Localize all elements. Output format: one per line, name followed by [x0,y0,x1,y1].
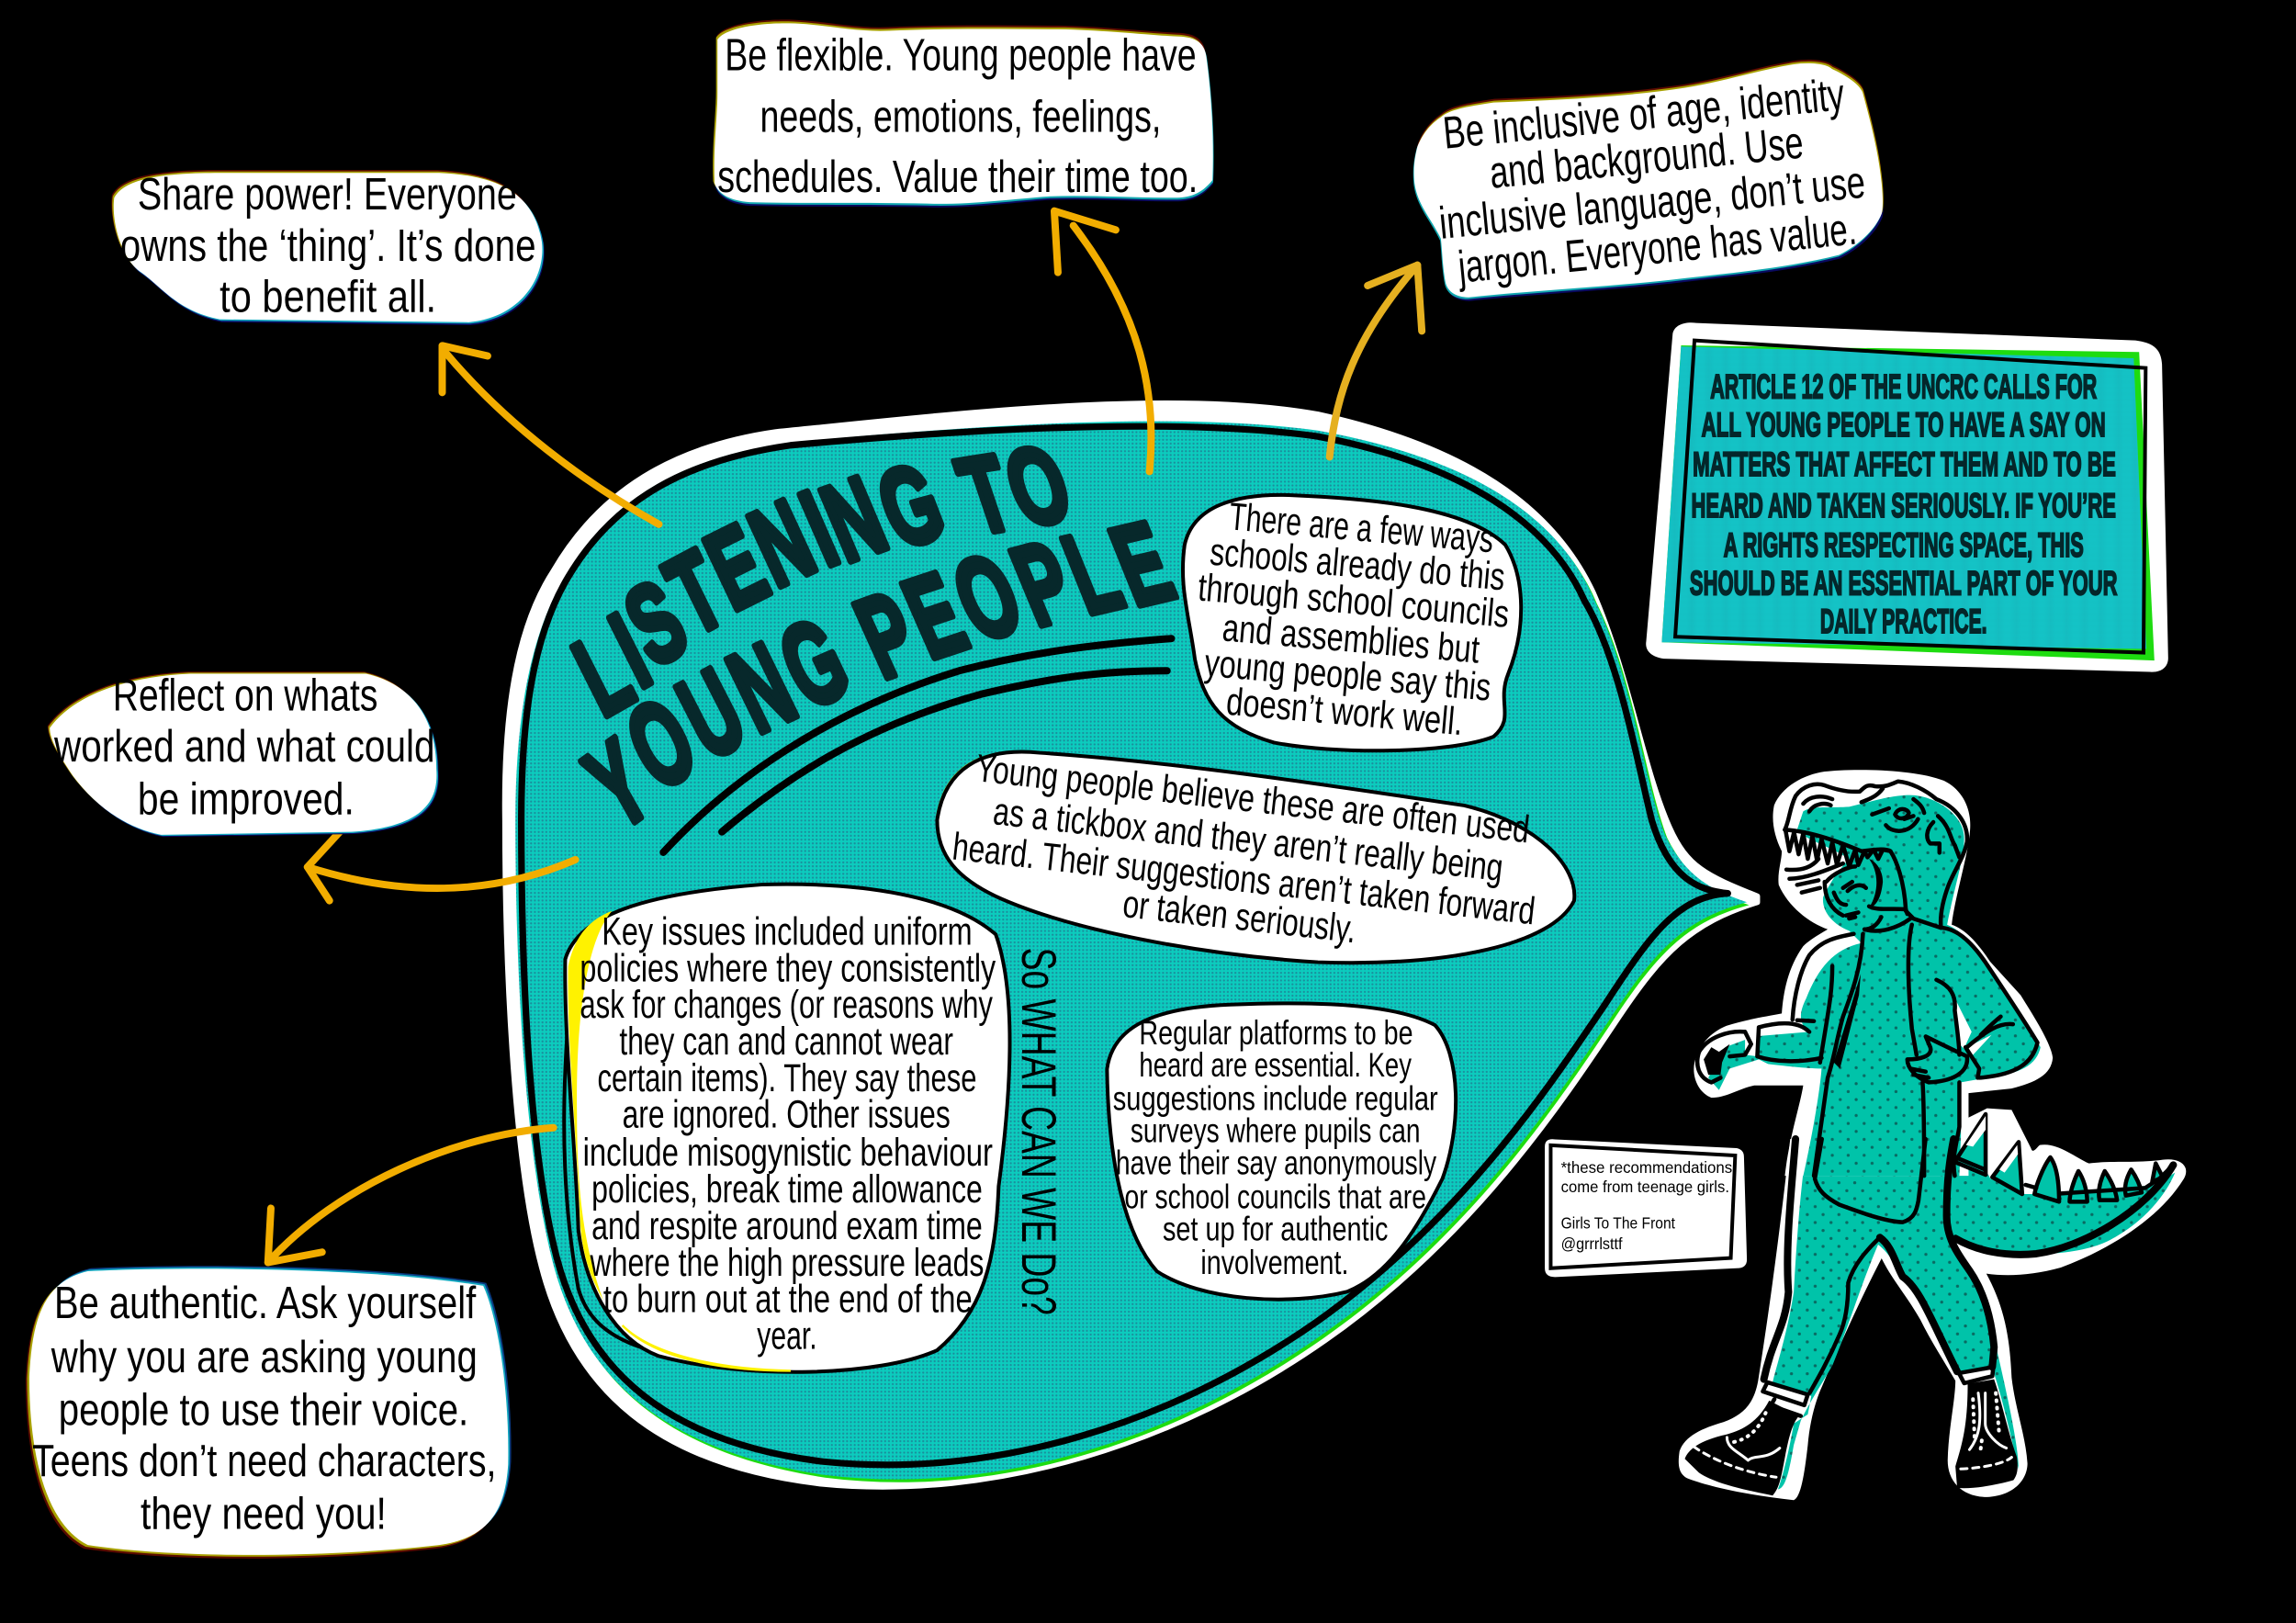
callout: share power: Share power! Everyone [138,169,517,220]
note card: @grrrlsttf [1561,1234,1623,1253]
arrow: reflect [308,832,576,901]
callout: be authentic: why you are asking young [51,1332,478,1382]
panel: regular platforms: Regular platforms to be [1139,1013,1413,1052]
callout: be inclusive: Be inclusive of age, identity [1441,69,1847,159]
panel: there are a few ways: There are a few ways [1228,494,1495,560]
panel: there are a few ways [1183,492,1521,750]
panel: tickbox: or taken seriously. [1120,882,1358,951]
arrow: be flexible [1054,211,1151,471]
panel: regular platforms: suggestions include regular [1113,1079,1438,1118]
panel: regular platforms: set up for authentic [1163,1209,1388,1247]
callout: be flexible: needs, emotions, feelings, [760,92,1161,142]
panel: regular platforms: involvement. [1200,1243,1348,1281]
panel: regular platforms: heard are essential. Key [1139,1045,1412,1084]
callout: be authentic: Be authentic. Ask yourself [54,1278,476,1328]
callout: be authentic: they need you! [141,1489,387,1539]
callout: be flexible: Be flexible. Young people have [725,30,1197,81]
callout: be inclusive: jargon. Everyone has value. [1455,204,1859,293]
callout: share power [111,169,545,325]
callout: share power: to benefit all. [219,272,436,322]
panel: key issues: policies, break time allowance [591,1167,983,1211]
panel: regular platforms: have their say anonymously [1116,1144,1436,1182]
title [531,386,1207,860]
callout: be flexible: schedules. Value their time too. [717,152,1198,202]
callout: share power: owns the ‘thing’. It’s done [120,220,536,271]
panel: there are a few ways: doesn’t work well. [1224,680,1465,743]
callout: be authentic: Teens don’t need characters, [32,1436,496,1486]
note card: come from teenage girls. [1561,1178,1729,1196]
panel: key issues: year. [757,1313,817,1357]
article 12 box: DAILY PRACTICE. [1820,603,1987,640]
panel: regular platforms: or school councils that are [1124,1177,1426,1215]
panel: regular platforms [1107,1003,1456,1300]
callout: be authentic: people to use their voice. [59,1384,468,1435]
panel: key issues: they can and cannot wear [619,1020,953,1063]
callout: be flexible [713,19,1214,208]
callout: be inclusive: inclusive language, don’t use [1437,157,1867,249]
panel: key issues: are ignored. Other issues [623,1093,951,1136]
title: YOUNG PEOPLE [544,476,1207,860]
panel: key issues: ask for changes (or reasons why [580,983,994,1026]
panel: tickbox [936,744,1574,971]
panel: regular platforms: surveys where pupils can [1131,1111,1421,1150]
panel: there are a few ways: schools already do this [1209,530,1507,598]
callout: be authentic [26,1266,512,1559]
note card: Girls To The Front [1561,1214,1675,1233]
callout: reflect: Reflect on whats [113,670,377,720]
arrow: be authentic [268,1128,554,1262]
arrow: share power [443,345,658,524]
note card [1545,1139,1747,1277]
panel: key issues: certain items). They say these [598,1056,976,1099]
panel: key issues: and respite around exam time [591,1204,983,1247]
panel: key issues: include misogynistic behaviour [583,1131,993,1174]
article 12 box [1646,322,2168,672]
panel: tickbox: as a tickbox and they aren’t really being [991,789,1505,889]
panel: there are a few ways: through school councils [1197,565,1511,636]
panel: key issues: Key issues included uniform [602,909,973,952]
callout: reflect [48,670,439,837]
panel: key issues: to burn out at the end of the [603,1278,973,1321]
panel: there are a few ways: young people say this [1203,641,1492,709]
panel: key issues [564,885,1010,1372]
title underline swooshes [663,638,1172,852]
title: LISTENING TO [531,386,1104,743]
panel: there are a few ways: and assemblies but [1221,605,1481,671]
panel: key issues: where the high pressure leads [590,1241,984,1284]
callout: be inclusive: and background. Use [1487,118,1806,198]
panel: tickbox: heard. Their suggestions aren’t taken forward [951,825,1537,932]
panel: key issues: policies where they consistently [580,946,996,989]
callout: reflect: worked and what could [53,721,435,772]
speech bubble [505,403,1757,1487]
illustration: girl in dinosaur costume [1679,770,2186,1500]
note card: *these recommendations [1561,1158,1732,1177]
arrow: be inclusive [1330,265,1422,456]
heading: so what can we do: So WHAT CAN WE Do? [1011,948,1065,1315]
callout: reflect: be improved. [138,774,355,825]
callout: be inclusive [1413,60,1884,301]
panel: tickbox: Young people believe these are often used [974,746,1532,851]
